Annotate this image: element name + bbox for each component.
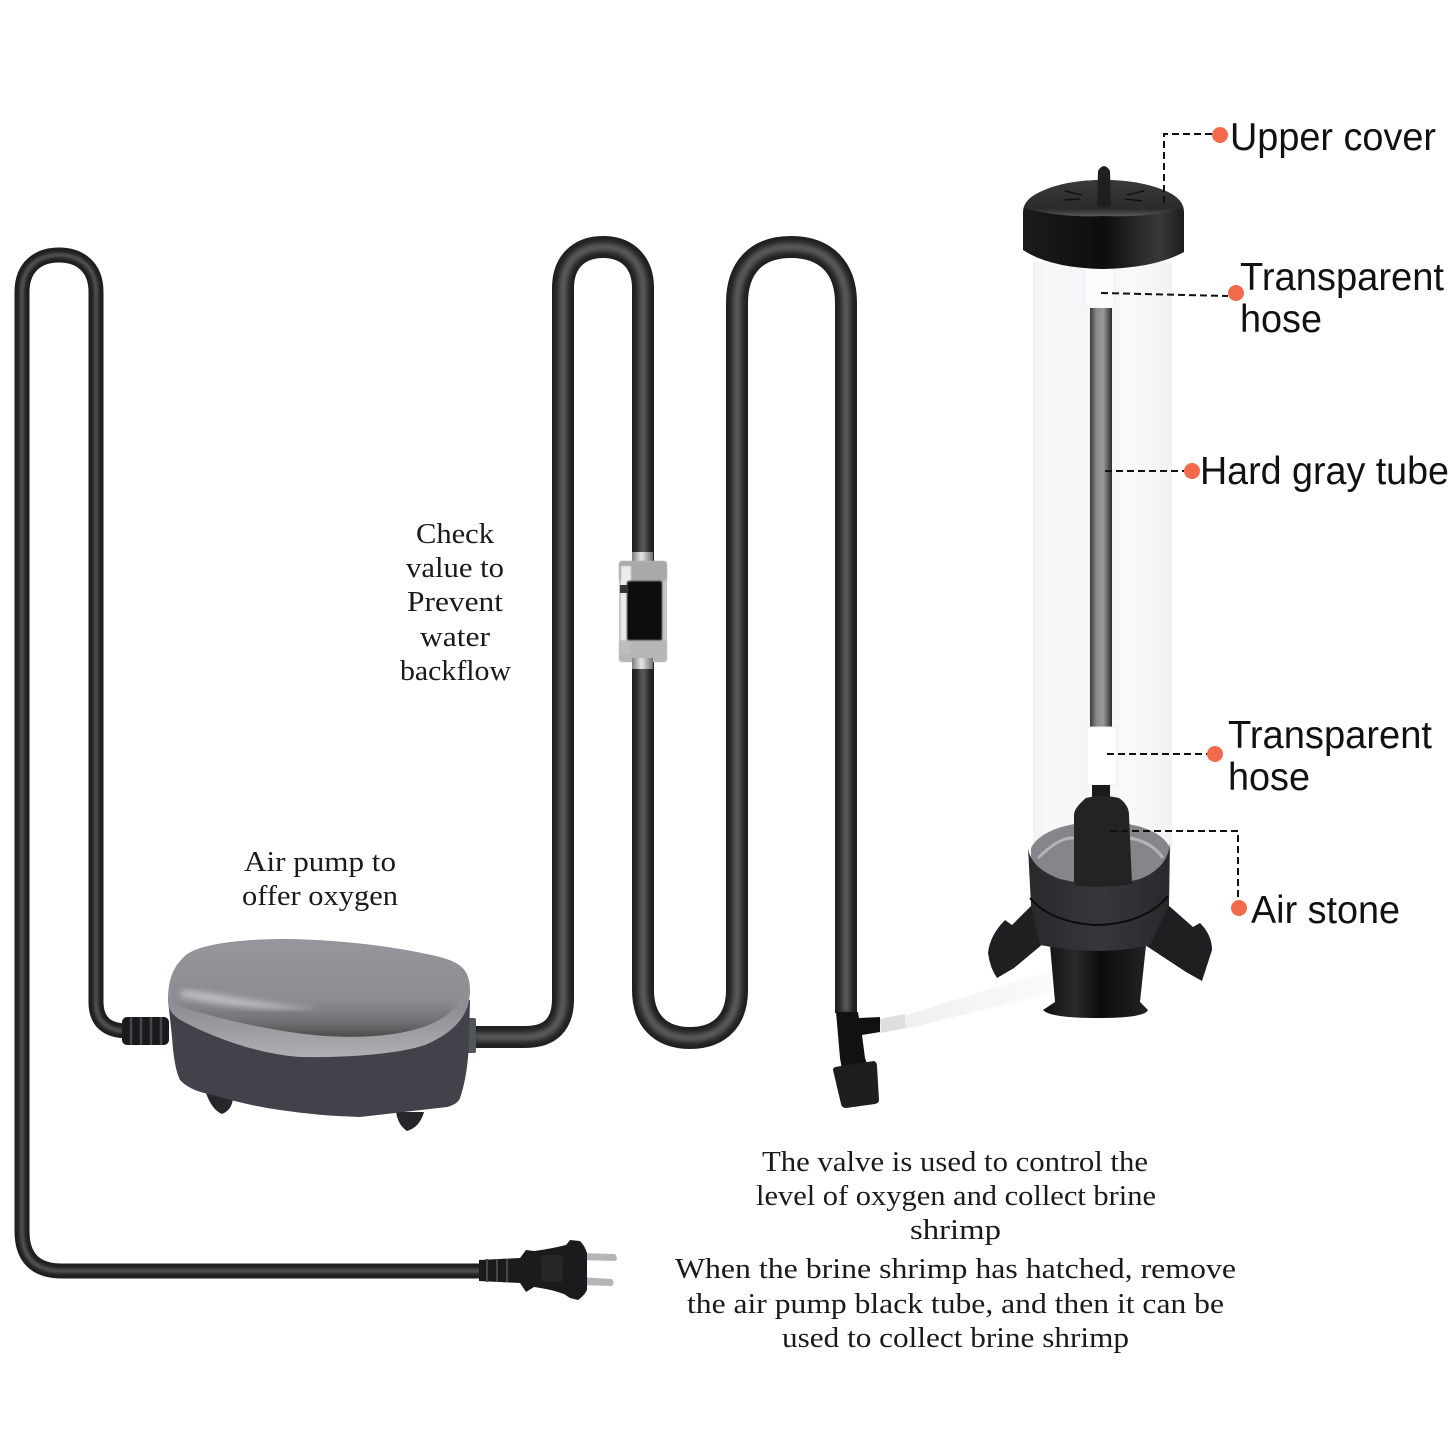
air tube from pump to valve	[474, 247, 846, 1038]
base stem	[1043, 945, 1148, 1018]
callout: upper cover: Upper cover	[1230, 116, 1436, 159]
plug pins	[578, 1253, 617, 1286]
pump feet	[206, 1093, 424, 1131]
text: check valve label: Prevent	[407, 586, 503, 618]
text: valve description: level of oxygen and collect brine	[756, 1180, 1156, 1212]
callout: bottom transparent hose: hose	[1228, 756, 1310, 799]
text: air pump label: Air pump to	[244, 846, 396, 878]
cover nipple	[1097, 166, 1111, 208]
text: check valve label: backflow	[400, 655, 511, 687]
pump outlet	[467, 1018, 476, 1053]
top transparent hose	[1085, 268, 1114, 308]
pump cord strain relief	[122, 1017, 169, 1045]
pump dome	[170, 940, 465, 1037]
base collar	[1028, 843, 1170, 951]
text: air pump label	[242, 846, 399, 912]
callout: hard gray tube: Hard gray tube	[1200, 450, 1449, 493]
callout: upper cover	[1164, 116, 1436, 207]
air pump	[122, 939, 476, 1131]
pump lower body	[168, 1000, 470, 1117]
base inner ring	[1031, 822, 1169, 885]
text: harvesting instructions: the air pump black tube, and then it can be	[687, 1288, 1224, 1320]
callout: bottom transparent hose: Transparent	[1228, 714, 1432, 757]
callout: air stone	[1110, 831, 1400, 932]
power cord tube	[22, 255, 490, 1271]
text: valve description: shrimp	[910, 1214, 1001, 1246]
bottom transparent hose	[1087, 727, 1117, 785]
transparent cylinder	[1033, 262, 1172, 852]
text: harvesting instructions: used to collect brine shrimp	[782, 1322, 1129, 1354]
pump band	[168, 939, 470, 1057]
hatching column	[988, 166, 1212, 1018]
side hose to column	[906, 970, 1052, 1029]
callout: air stone: Air stone	[1251, 889, 1400, 932]
hose sleeve	[880, 1014, 906, 1033]
callout: bottom transparent hose	[1107, 714, 1432, 799]
air stone connector	[1092, 785, 1110, 799]
base legs	[988, 905, 1212, 981]
pump dome highlight	[180, 990, 320, 1009]
upper cover	[1023, 166, 1184, 269]
flow valve and side hose	[833, 970, 1052, 1108]
text: check valve label	[400, 518, 511, 687]
cover body	[1023, 180, 1184, 269]
callout: top transparent hose	[1101, 256, 1444, 341]
valve elbow	[836, 1012, 880, 1070]
cover top	[1024, 180, 1183, 216]
hard gray tube	[1090, 308, 1112, 727]
plug body	[479, 1240, 587, 1300]
text: valve description: The valve is used to control the	[762, 1146, 1148, 1178]
check valve	[619, 552, 667, 669]
callout: top transparent hose: Transparent	[1240, 256, 1444, 299]
text: harvesting instructions	[675, 1253, 1236, 1354]
text: check valve label: Check	[416, 518, 495, 550]
text: check valve label: value to	[406, 552, 504, 584]
callout: top transparent hose: hose	[1240, 298, 1322, 341]
text: air pump label: offer oxygen	[242, 880, 399, 912]
power plug	[479, 1240, 617, 1300]
air stone	[1074, 796, 1132, 887]
text: harvesting instructions: When the brine shrimp has hatched, remove	[675, 1253, 1236, 1285]
text: check valve label: water	[420, 621, 490, 653]
text: valve description	[756, 1146, 1156, 1246]
knurled nut	[833, 1061, 879, 1108]
